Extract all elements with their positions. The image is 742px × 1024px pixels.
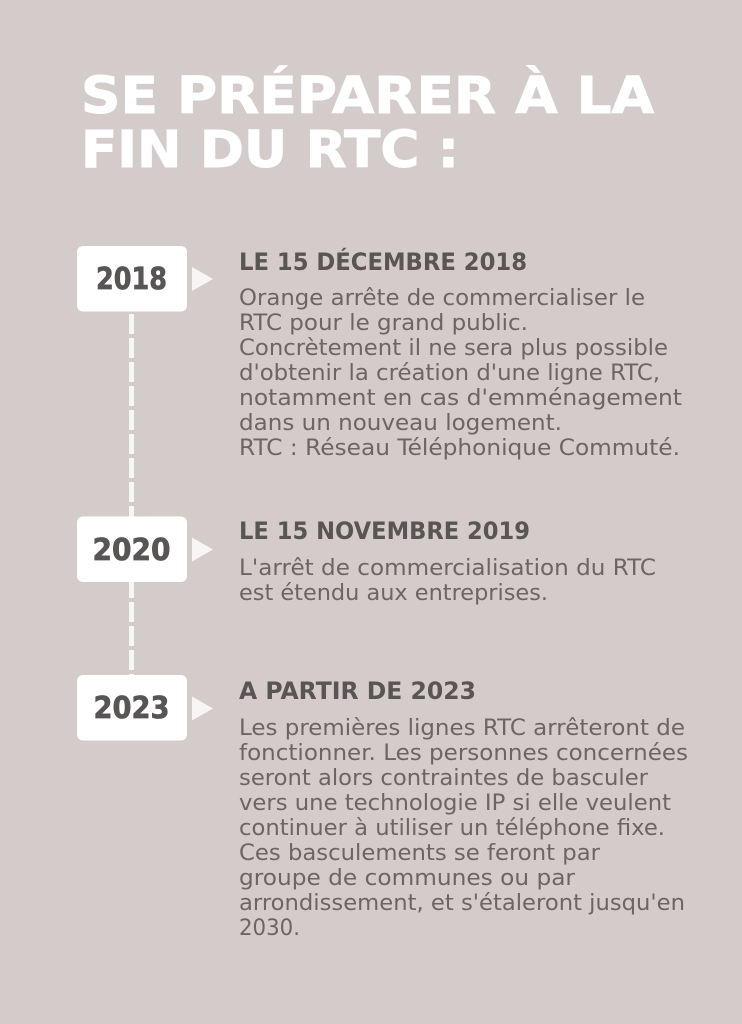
- body 2023: continuer à utiliser un téléphone fixe.: [239, 816, 665, 841]
- body 2018: RTC pour le grand public.: [239, 311, 528, 336]
- body 2023: Les premières lignes RTC arrêteront de: [239, 716, 685, 741]
- arrow 2023: [192, 696, 213, 720]
- body 2019: est étendu aux entreprises.: [239, 581, 548, 606]
- heading 2019: LE 15 NOVEMBRE 2019: [239, 517, 530, 545]
- entry 2023: [239, 677, 688, 941]
- body 2018: dans un nouveau logement.: [239, 411, 562, 436]
- body 2023: [239, 716, 688, 941]
- year badge 2020: [77, 516, 187, 582]
- body 2018: [239, 286, 682, 461]
- year badge 2023: [77, 675, 187, 740]
- heading 2023: A PARTIR DE 2023: [239, 677, 476, 705]
- year badge 2020: 2020: [92, 533, 170, 568]
- entry 2019: [239, 517, 656, 606]
- year badge 2018: 2018: [96, 262, 167, 297]
- body 2019: L'arrêt de commercialisation du RTC: [239, 556, 656, 581]
- body 2018: RTC : Réseau Téléphonique Commuté.: [239, 436, 680, 461]
- body 2018: Concrètement il ne sera plus possible: [239, 336, 668, 361]
- year badge 2023: 2023: [94, 691, 170, 726]
- body 2018: Orange arrête de commercialiser le: [239, 286, 645, 311]
- title: [81, 65, 655, 180]
- body 2023: vers une technologie IP si elle veulent: [239, 791, 671, 816]
- year badge 2018: [77, 246, 187, 312]
- title: FIN DU RTC :: [81, 121, 459, 180]
- body 2023: 2030.: [239, 916, 300, 941]
- body 2018: d'obtenir la création d'une ligne RTC,: [239, 361, 660, 386]
- body 2023: groupe de communes ou par: [239, 866, 576, 891]
- body 2018: notamment en cas d'emménagement: [239, 386, 682, 411]
- body 2023: seront alors contraintes de basculer: [239, 766, 649, 791]
- heading 2018: LE 15 DÉCEMBRE 2018: [239, 247, 527, 276]
- title: SE PRÉPARER À LA: [81, 65, 655, 126]
- entry 2018: [239, 247, 682, 461]
- body 2023: fonctionner. Les personnes concernées: [239, 741, 688, 766]
- body 2023: arrondissement, et s'étaleront jusqu'en: [239, 891, 685, 916]
- timeline connector: [129, 314, 134, 677]
- body 2023: Ces basculements se feront par: [239, 841, 601, 866]
- body 2019: [239, 556, 656, 606]
- arrow 2020: [192, 538, 213, 562]
- arrow 2018: [192, 267, 213, 291]
